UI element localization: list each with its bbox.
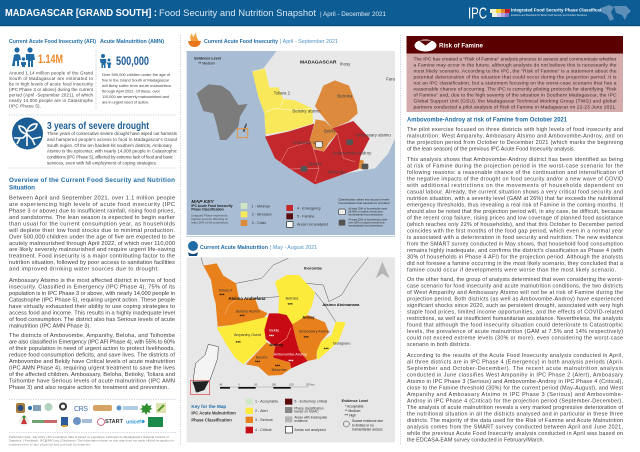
- paragraph 1: are experiencing high levels of acute food insecurity (IPC: [9, 202, 175, 208]
- evidence stars: ***: [304, 335, 309, 340]
- paragraph 2: population is in IPC Phase 3 or above, with nearly 14,000 people in: [9, 291, 175, 297]
- paragraph 3: could not exceed extreme levels (30% or more), even considering the worst-case: [407, 336, 623, 342]
- map labels: Beloha: [308, 161, 322, 166]
- map labels: Atsimo Andrefana: [228, 296, 266, 301]
- AMN heading: Acute Malnutrition (AMN): [100, 39, 164, 45]
- paragraph 3: case scenario for food insecurity and acute malnutrition conditions, the two districts: [407, 284, 623, 290]
- icon: bowl: [188, 33, 201, 47]
- risk of famine text: potential deterioration of the situation that could occur during the projection period. It is: [414, 74, 617, 80]
- evidence level: Evidence Level: [194, 57, 221, 61]
- map key: 25-50% of caloric needs from: [348, 209, 384, 213]
- AFI text: South of Madagascar are estimated to: [9, 76, 94, 81]
- AMN text: through April 2022. Of these, over: [102, 88, 161, 93]
- map: acute malnutrition: [187, 257, 395, 442]
- evidence stars: ***: [324, 346, 329, 351]
- AFI text: (IPC Phase 5).: [9, 104, 41, 108]
- AMN text: five in the Grand South of Madagascar: [102, 77, 170, 82]
- evidence stars: ***: [269, 333, 274, 338]
- key for the map: * Acceptable: [345, 405, 364, 409]
- map key: humanitarian food assistance: [348, 223, 383, 227]
- paragraph 2: of the recent crop failure, rising prices and low coverage of planned food assistance: [407, 215, 623, 221]
- paragraph 3: are also classified in Emergency (IPC AFI Phase 4), with 55% to 60%: [9, 340, 175, 346]
- map panel heading: AMN: Current Acute Malnutrition: [200, 245, 268, 251]
- key for the map: IPC Acute Malnutrition: [191, 410, 236, 415]
- paragraph 2: following reasons: a reasonable chance of the continuation and intensification of: [407, 170, 624, 176]
- evidence stars: ***: [275, 363, 280, 368]
- north arrow: [376, 262, 390, 278]
- map labels: Bekily: [324, 128, 336, 133]
- paragraph 4: the EDCASA-EAM survey conducted in February/March.: [407, 437, 544, 443]
- paragraph 3: Ambovombe and Bekily have Critical levels of acute malnutrition: [9, 359, 175, 365]
- scale bar: 0: [238, 382, 240, 386]
- map key: highest severity affecting at: [191, 217, 228, 221]
- map labels: Beloha: [256, 356, 268, 360]
- map key: Phase Classification: [191, 208, 224, 212]
- key for the map: 2 - Alert: [255, 409, 268, 413]
- paragraph 3: of the affected children. Amboasary, Beloha, Betioky, Toliara and: [9, 372, 175, 378]
- AFI text: be in high levels of acute food insecurity: [9, 82, 94, 86]
- map key: MAP KEY: [191, 199, 215, 205]
- region: Betroka alert: [275, 275, 315, 324]
- paragraph 2: emergency thresholds, thus revealing a real risk of Famine in the coming months. It: [407, 202, 624, 208]
- evidence stars: [219, 293, 329, 368]
- paragraph 1: Phase 3 or above) due to insufficient rainfall, rising food prices,: [9, 208, 175, 214]
- AFI heading: Current Acute Food Insecurity (AFI): [9, 39, 96, 45]
- map labels: Betioky atsimo: [292, 108, 321, 113]
- AFI text: period (April -September 2021), of which: [9, 92, 94, 98]
- map key: [191, 197, 390, 227]
- risk of famine text: [414, 56, 617, 110]
- paragraph 3: levels, the prevalence of acute malnutrition (GAM at 7.5% and 14% respectively): [407, 329, 623, 335]
- panel: overview text: [8, 177, 175, 391]
- header banner: [0, 0, 640, 26]
- paragraph 2: 30% of households in Phase 4 AFI) for the projection period. Although the analysts: [407, 254, 623, 260]
- icon: child head: [188, 241, 198, 256]
- paragraph 3: staple food prices, limited income opportunities, and the effects of COVID-related: [407, 310, 623, 316]
- key for the map: humanitarian access: [352, 428, 383, 432]
- paragraph 2: Catastrophe (IPC Phase 5), requiring urgent action. These people: [9, 297, 175, 303]
- risk of famine text: reasonable chance of occurring. The IPC is currently piloting protocols for identifying "Risk: [414, 86, 617, 92]
- paragraph 1: treatment. Food insecurity is a major contributing factor to the: [9, 254, 175, 260]
- map labels: [274, 60, 395, 174]
- AFI text: (IPC Phase 3 or above) during the current: [9, 87, 94, 92]
- paragraph 1: the projection period from October to December 2021 (which marks the beginning: [407, 140, 623, 146]
- region: stressed: [252, 68, 313, 134]
- paragraph 2: malnutrition (IPC AMN Phase 3).: [9, 323, 91, 329]
- map labels: Anosy: [302, 314, 315, 319]
- paragraph 2: Amboasary Atsimo is the most affected district in terms of food: [9, 278, 175, 284]
- drought text: Atsimo is the epicenter, with nearly 14,000 people in Catastrophic: [47, 149, 178, 154]
- AFI text: nearly 14,000 people are in Catastrophe: [9, 98, 94, 103]
- paragraph 2: nutrition situation, with a severity level (GAM at 26%) that far exceeds the nutritional: [407, 196, 623, 202]
- map labels: MADAGASCAR: [300, 60, 337, 66]
- paragraph 2: [406, 157, 624, 273]
- drought text: South region. Of the ten hardest-hit southern districts, Ambosary: [47, 143, 173, 148]
- paragraph 1: are likely severely malnourished and require urgent life-saving: [9, 247, 175, 253]
- map key: 2 - Stressed: [252, 213, 271, 217]
- 1.14M figure: 1.14M: [38, 52, 63, 66]
- date range: | April - December 2021: [320, 11, 387, 18]
- paragraph 3: [9, 333, 175, 391]
- evidence stars: ***: [236, 340, 241, 345]
- paragraph 3: found that although the food insecurity situation could deteriorate to Catastrophic: [407, 322, 623, 328]
- risk of famine text: partners conducted a pilot analysis of Risk of Famine in Madagascar on 22-23 June 2021.: [414, 104, 616, 110]
- icon: family: [12, 47, 35, 67]
- risk of famine text: of Famine" and, due to the high severity of the situation in Southern Madagascar, the IPC: [414, 92, 617, 98]
- map panel heading: AMN: [186, 236, 395, 256]
- key for the map: Areas not analysed: [294, 428, 326, 432]
- paragraph 3: The districts of Ambovombe, Ampanihy, Beloha, and Tsihombe: [9, 333, 175, 339]
- map key: 1 - Minimal: [252, 204, 270, 208]
- footnote: Publication date: July 2021 | IPC population data is based on population estimates by Madagascar's National Institute of: [9, 435, 169, 439]
- overview heading: Overview of the Current Food Security and Nutrition: [9, 177, 175, 184]
- paragraph 2: have virtually exhausted their ability to use coping strategies to: [9, 304, 175, 310]
- paragraph 2: [9, 278, 175, 329]
- paragraph 4: According to the results of the Acute Food Insecurity analysis conducted in April,: [407, 353, 624, 359]
- map labels: Androy: [269, 342, 284, 347]
- paragraph 3: significant shocks since 2020, such as persistent drought, associated with very high: [407, 303, 623, 309]
- key for the map: Phase classification: [294, 406, 324, 410]
- paragraph 1: and sandstorms. The lean season is expected to begin earlier: [9, 215, 175, 221]
- paragraph 4: close to the Famine threshold (30%) for the current period (May-August), and West: [407, 385, 624, 391]
- scale bar: 200 km: [306, 382, 315, 386]
- key for the map: 3 - Serious: [255, 418, 273, 422]
- paragraph 1: Over 500,000 children under the age of five are expected to be: [9, 234, 175, 240]
- paragraph 4: while the previous Acute Food Insecurity analysis conducted in April was based on: [406, 431, 623, 437]
- paragraph 1: [407, 127, 623, 152]
- map labels: Bekily: [269, 328, 279, 332]
- panel: risk of famine: [406, 36, 623, 112]
- map key: At least 25% of households meet: [348, 217, 387, 221]
- partner logos: unicef: [126, 420, 141, 426]
- map key: humanitarian food assistance: [348, 212, 383, 216]
- map labels: Ambovombe-androy: [332, 150, 372, 155]
- key for the map: based on MUAC: [294, 410, 319, 414]
- AMN text: [102, 72, 171, 104]
- key for the map: evidence: [294, 419, 308, 423]
- map labels: Ampanihy Ouest: [234, 333, 261, 337]
- map key: Areas not analysed: [297, 223, 328, 227]
- AMN text: Over 500,000 children under the age of: [102, 72, 171, 77]
- map labels: Ambovombe-Androy: [274, 353, 307, 357]
- IPC logo: IPC: [468, 6, 487, 22]
- Africa locator: [197, 84, 248, 140]
- map key: At least 25% of households meet: [348, 206, 387, 210]
- drought text: Three years of consecutive severe drought have wiped out harvests: [47, 131, 178, 136]
- paragraph 3: Phase 3) and also require action for treatment and prevention.: [9, 385, 169, 391]
- paragraph 2: from the SMART survey conducted in May shows, that household food consumption: [407, 241, 623, 247]
- partner logos: START: [105, 419, 124, 425]
- paragraph 4: districts. The majority of the data used for the Risk of Famine and Acute Malnutrition: [407, 418, 623, 424]
- map key: over 50% of caloric needs from: [348, 220, 386, 224]
- paragraph 2: This analysis shows that Ambovombe-Androy district has been identified as being: [407, 157, 623, 163]
- paragraph 3: projection period. Both districts (as well as Ambovombe-Androy) have experienced: [407, 296, 623, 302]
- map labels: Atsimo Atsimanana: [322, 302, 360, 307]
- map key: humanitarian food assistance provided: [338, 201, 390, 205]
- paragraph 3: [407, 277, 623, 348]
- key for the map: 5 - Extremely critical: [294, 400, 327, 404]
- paragraph 1: than usual for the current consumption year, as households: [9, 221, 175, 227]
- paragraph 3: Tsihombe have Serious levels of acute malnutrition (IPC AMN: [9, 378, 175, 384]
- paragraph 1: and improved drinking water sources due to drought.: [9, 267, 159, 273]
- paragraph 2: with additional restrictions on the movements of households dependent on: [406, 183, 623, 189]
- overview heading: [9, 177, 175, 192]
- map labels: Taolagnaro: [332, 341, 350, 345]
- paragraph 1: [8, 196, 175, 273]
- evidence stars: ***: [255, 360, 260, 365]
- dividers: [9, 35, 400, 445]
- region: Beloha and Tsihombe serious: [246, 342, 291, 376]
- paragraph 3: (IPC AMN Phase 4), requiring urgent treatment to save the lives: [9, 366, 175, 372]
- section heading: Ambovombe-Androy at risk of Famine from October 2021: [407, 118, 568, 124]
- risk of famine heading: Risk of Famine: [439, 42, 483, 50]
- paragraph 2: (which reaches only 22% of households), and that this October to December period: [407, 222, 623, 228]
- scale bar: 40: [219, 382, 223, 386]
- key for the map: Key for the Map: [191, 404, 226, 409]
- AMN text: are in urgent need of action.: [102, 99, 149, 104]
- key for the map: Evidence Level: [342, 399, 368, 403]
- paragraph 2: is associated with a deterioration in food security and nutrition. The new evidence: [407, 235, 623, 241]
- key for the map: *** High: [344, 413, 356, 417]
- paragraph 2: coincides with the first months of the food gap period, which even in a normal year: [407, 228, 623, 234]
- paragraph 4: September and October-December). The recent acute malnutrition analysis: [407, 366, 623, 372]
- map key: Classification takes into account levels: [338, 197, 390, 201]
- map key: (mapped Phase represents: [191, 213, 228, 217]
- region: Bekily and Ambovombe critical: [264, 313, 308, 368]
- paragraph 2: remains highly inadequate, and confirms the district's classification as Phase 4 (with: [407, 248, 623, 254]
- paragraph 4: the nutritional situation in all the districts analysed and in particular in these three: [407, 411, 623, 417]
- map labels: Tsihombe: [327, 169, 346, 174]
- paragraph 2: famine could occur if developments were worse than the most likely scenario.: [407, 267, 616, 273]
- risk of famine text: a Famine may occur in the future, although analysts do not believe this is necessarily the: [414, 62, 617, 68]
- paragraph 2: at risk of Famine during the projection period in the worst-case scenario for the: [407, 163, 623, 169]
- region: Amboasary serious: [292, 315, 329, 361]
- evidence stars: ***: [288, 302, 293, 307]
- evidence stars: ***: [288, 358, 294, 363]
- key for the map: Scarce evidence due: [352, 419, 383, 423]
- map: acute food insecurity: [187, 51, 395, 235]
- key for the map: ** Medium: [345, 409, 361, 413]
- paragraph 2: casual labour. Already, the current situation shows a very critical food security and: [407, 189, 623, 195]
- icon: drought plant: [12, 118, 43, 150]
- map key: IPC Acute Food Insecurity: [191, 204, 233, 208]
- subtitle: Food Security and Nutrition Snapshot: [159, 8, 316, 19]
- region: Tsaolagnaro alert: [317, 322, 346, 360]
- risk of famine text: Global Support Unit (GSU), the Madagascar Technical Working Group (TWG) and global: [414, 98, 616, 104]
- map panel heading: AFI: | April - September 2021: [280, 39, 338, 45]
- paragraph 2: did not foresee a famine occurring in the most likely scenario, they concluded that a: [407, 261, 623, 267]
- risk of famine text: The IPC has created a "Risk of Famine" analysis process to assess and communicate whether: [414, 56, 617, 62]
- overview heading: Situation: [9, 184, 35, 192]
- map panel heading: AFI: Current Acute Food Insecurity: [204, 39, 278, 45]
- icon: empty bowl: [414, 40, 436, 52]
- paragraph 4: Ampanihy and Amboasary Atsimo in IPC Phase 3 (Serious) and Ambovombe-: [407, 392, 623, 398]
- AFI text: Around 1.14 million people of the Grand: [9, 70, 94, 76]
- map labels: [218, 265, 360, 372]
- partner logos: CRS: [74, 406, 88, 413]
- risk of famine text: most likely scenario. According to the IPC, the "Risk of Famine" is a statement about the: [414, 68, 617, 74]
- map labels: Amboasary Atsimo: [299, 330, 329, 334]
- IPC logo: Evidence and Standards for Better Food Security and Nutrition Decisions: [511, 13, 588, 17]
- paragraph 4: analysis comes from the SMART survey conducted between April and June 2021,: [407, 424, 624, 430]
- map labels: Betioky Atsimo: [236, 309, 260, 313]
- map labels: Ampanihy ouest: [292, 140, 324, 145]
- map labels: Toliara 2: [274, 90, 291, 95]
- drought text: conditions (IPC Phase 5), affected by extreme lack of food and basic: [47, 155, 174, 160]
- paragraph 3: On the other hand, the group of analysts determined that even considering the worst-: [407, 277, 623, 283]
- drought text: and hampered people's access to food in Madagascar's Grand: [47, 137, 178, 142]
- paragraph 1: The pilot exercise focused on three districts with high levels of food insecurity and: [407, 127, 623, 133]
- key for the map: [191, 399, 383, 433]
- footnote: endorsement of any physical and political boundaries.: [9, 442, 91, 446]
- paragraph 3: of West Ampanihy and Amboasary Atsimo will not be at risk of Famine during the: [407, 290, 623, 296]
- panel: Ambovombe-Androy text: [406, 118, 624, 443]
- AMN text: 110,000 are severely malnourished and: [102, 94, 169, 99]
- map labels: Toliary II: [218, 288, 232, 292]
- region: Ampanihy alert: [217, 317, 268, 364]
- footnote: [9, 435, 174, 446]
- drought text: [47, 131, 178, 166]
- paragraph 2: insecurity. Classified in Emergency (IPC Phase 4), 75% of its: [9, 284, 175, 290]
- 500,000 figure: 500,000: [116, 54, 149, 68]
- key for the map: 4 - Critical: [255, 428, 272, 432]
- paragraph 2: of food consumption. The district also has Serious levels of acute: [9, 317, 175, 323]
- region: emergency: [265, 121, 370, 184]
- paragraph 1: malnutrition: West Ampanihy, Amboasary Atsimo and Ambovombe-Androy, and on: [407, 133, 623, 139]
- map panel heading: AMN: | May - August 2021: [270, 245, 317, 251]
- paragraph 4: The analysis of acute malnutrition reveals a very marked progressive deterioration of: [407, 405, 624, 411]
- partner logos: [16, 402, 166, 427]
- risk of famine text: not an IPC classification, but a statement focusing on the worst-case scenario that has a: [414, 80, 617, 86]
- paragraph 2: the negative impacts of the drought on food security and/or a new wave of COVID: [407, 176, 623, 182]
- paragraph 2: access food and income. This results in a highly inadequate level: [9, 310, 175, 316]
- scale bar: 100: [272, 382, 277, 386]
- scale bar: [219, 382, 315, 389]
- map labels: Betroka: [286, 296, 299, 300]
- paragraph 4: [406, 353, 624, 443]
- icon: children: [100, 54, 111, 68]
- paragraph 4: Atsimo in IPC Phase 3 (Serious) and Ambovombe-Androy in IPC Phase 4 (Critical),: [407, 379, 624, 385]
- region: crisis: [310, 80, 364, 169]
- map key: least 20% of the population): [191, 221, 228, 225]
- map labels: Betroka: [337, 93, 353, 98]
- map key: 3 - Crisis: [252, 221, 266, 225]
- paragraph 4: Androy in IPC Phase 4 (Critical) for the projection period (September-December).: [407, 398, 623, 404]
- paragraph 1: Between April and September 2021, over 1.1 million people: [9, 196, 175, 202]
- map labels: Fara: [386, 76, 395, 81]
- AFI text: [9, 70, 94, 108]
- paragraph 3: restrictions, as well as insufficient humanitarian assistance. Nevertheless, the analysts: [407, 316, 623, 322]
- key for the map: to limited or no: [352, 423, 374, 427]
- paragraph 4: conducted in June classifies West Ampanihy in IPC Phase 2 (Alert), Amboasary: [407, 372, 623, 378]
- evidence stars: ***: [240, 314, 245, 319]
- map labels: Ihosy: [340, 61, 351, 66]
- key for the map: Areas with inadequate: [294, 416, 327, 420]
- map labels: Ihorombe: [304, 265, 323, 270]
- Madagascar locator: [191, 344, 218, 395]
- paragraph 2: should also be noted that the projection period will, in any case, be difficult, because: [407, 209, 623, 215]
- map key: 5 - Famine: [297, 215, 314, 219]
- district boundaries: [201, 257, 368, 322]
- map: acute food insecurity: ** Medium: [198, 61, 215, 65]
- paragraph 1: nutrition situation, followed by poor access to sanitation facilities: [9, 260, 175, 266]
- paragraph 3: scenario in both districts.: [407, 342, 471, 348]
- drought text: services, even with full employment of coping strategies.: [47, 160, 157, 166]
- paragraph 3: of their population in need of urgent action to protect livelihoods,: [9, 346, 175, 352]
- paragraph 1: will deplete their low food stocks due to minimal production.: [8, 228, 175, 234]
- paragraph 1: of the lean season) of the previous IPC Acute Food Insecurity analysis.: [407, 146, 575, 152]
- paragraph 4: all three districts are in IPC Phase 4 (Emergency) in both analysis periods (April-: [407, 359, 623, 365]
- map panel heading: AFI: [188, 33, 338, 47]
- map labels: Amboasary atsimo: [355, 132, 391, 137]
- paragraph 1: acutely malnourished through April 2022, of which over 110,000: [9, 241, 175, 247]
- IPC logo: Integrated Food Security Phase Classification: [511, 8, 608, 12]
- panel: drought: [12, 118, 178, 166]
- map labels: Tsihombe: [271, 368, 287, 372]
- paragraph 3: reduce food consumption deficits, and save lives. The districts of: [9, 352, 175, 358]
- key for the map: Phase Classification: [191, 417, 232, 422]
- IPC logo: [468, 5, 631, 22]
- evidence stars: ***: [219, 293, 225, 298]
- panel: key figures: [9, 39, 171, 108]
- humanitarian assistance icons: [301, 139, 368, 172]
- scale bar: 150: [289, 382, 294, 386]
- key for the map: 1 - Acceptable: [255, 400, 278, 404]
- title: MADAGASCAR [GRAND SOUTH] :: [5, 8, 157, 19]
- drought heading: 3 years of severe drought: [47, 121, 150, 132]
- map key: 4 - Emergency: [297, 206, 321, 210]
- scale bar: 50: [254, 382, 258, 386]
- region: serious west: [203, 263, 268, 327]
- footnote: Statistics. | Feedback: IPC@FAO.org | Disclaimer: The information shown on this map does not imply official recognition or: [9, 439, 174, 443]
- AMN text: will likely suffer from acute malnutrition: [102, 83, 171, 88]
